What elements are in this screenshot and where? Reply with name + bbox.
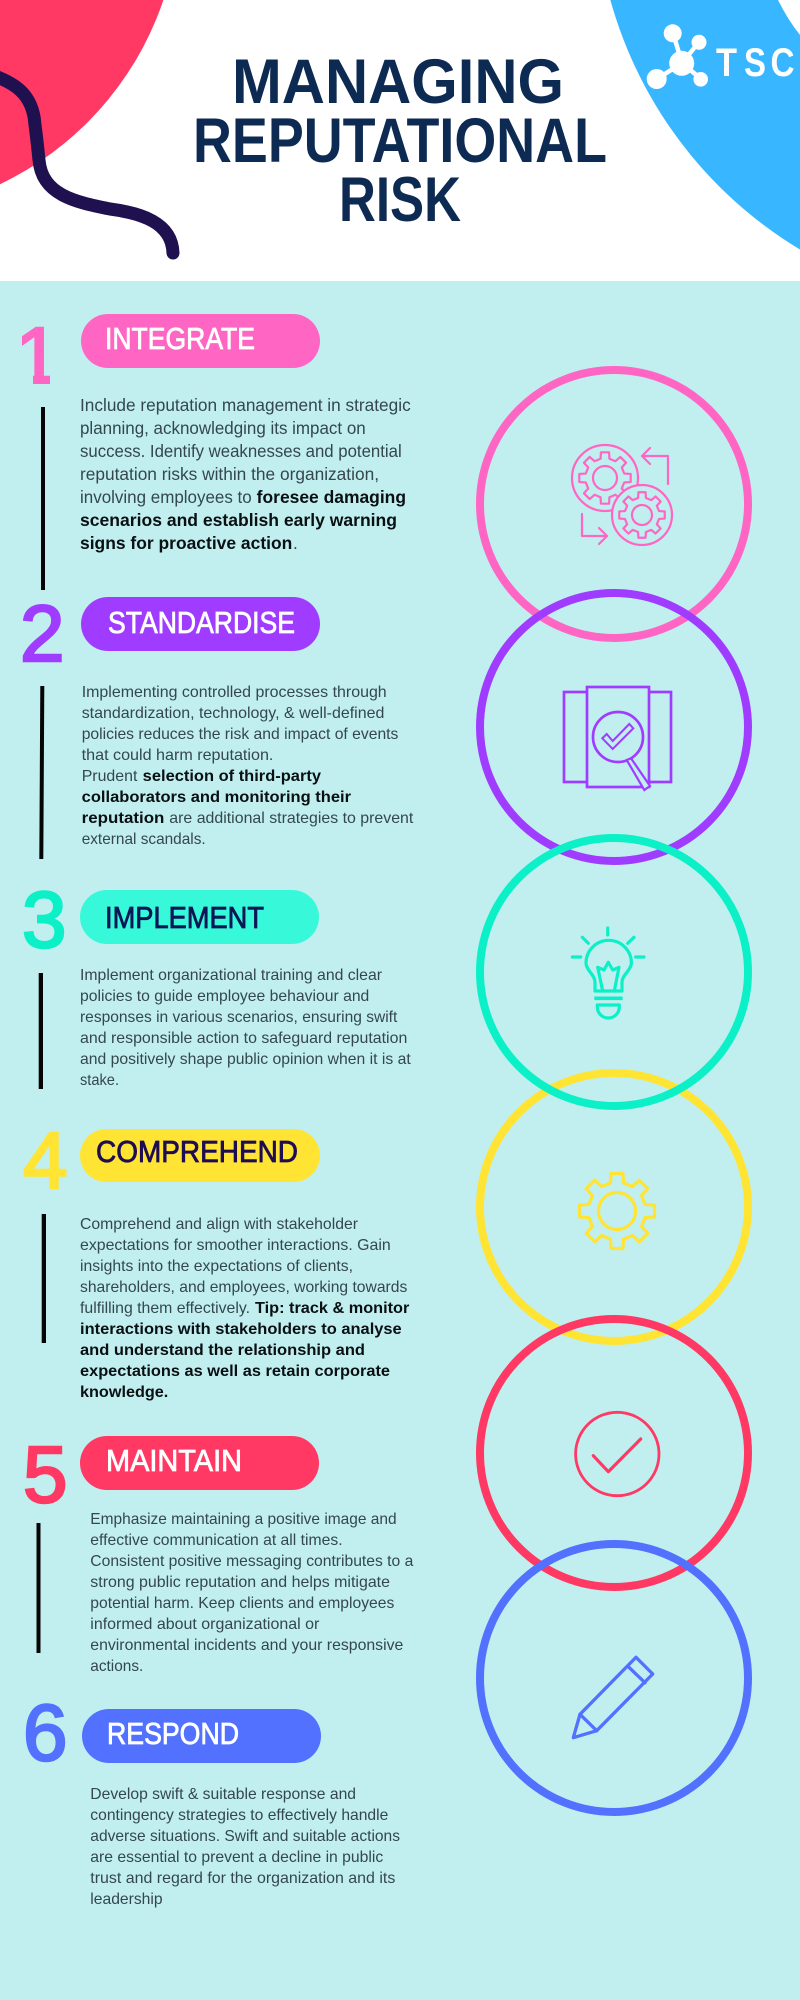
pill: COMPREHEND: COMPREHEND [96,1134,298,1169]
text: integrate description: involving employees to [80,487,252,507]
pill: IMPLEMENT: IMPLEMENT [105,900,264,935]
icon: gears with arrows [572,445,672,545]
pill: INTEGRATE: INTEGRATE [105,321,255,356]
timeline bar 5 [36,1523,40,1653]
step 6: respond [23,1688,400,1908]
ring: implement [480,838,748,1106]
text: maintain description: informed about organizational or [90,1616,320,1633]
text: maintain description: effective communication at all times. [90,1532,343,1549]
text: comprehend description: Comprehend and align with stakeholder [80,1216,359,1233]
text: standardise description: policies reduces the risk and impact of events [82,726,398,743]
text: maintain description: actions. [90,1658,143,1675]
step 1: integrate [16,311,411,590]
number 4: 4 [23,1116,68,1205]
text: integrate description: scenarios and establish early warning [80,510,397,530]
pill: MAINTAIN [80,1436,319,1490]
text: maintain description: environmental incidents and your responsive [90,1637,403,1654]
text: respond description: Develop swift & suitable response and [90,1786,356,1803]
text: implement description: and responsible action to safeguard reputation [80,1030,407,1047]
text: comprehend description: fulfilling them effectively. [80,1300,250,1317]
text: comprehend description: shareholders, and employees, working towards [80,1279,407,1296]
text: maintain description [90,1511,413,1675]
pill: COMPREHEND [80,1129,320,1182]
text: standardise description [82,684,414,848]
pill: INTEGRATE [81,314,320,368]
icon: check in circle [576,1412,659,1496]
title: REPUTATIONAL [193,106,607,176]
step 5: maintain [23,1430,413,1675]
text: standardise description: external scandals. [82,831,206,848]
number 6: 6 [23,1688,68,1777]
timeline bar 4 [42,1214,46,1343]
number 5: 5 [23,1430,68,1519]
text: implement description: Implement organizational training and clear [80,967,383,984]
text: implement description: and positively shape public opinion when it is at [80,1051,411,1068]
pill: RESPOND: RESPOND [107,1716,239,1751]
text: maintain description: strong public reputation and helps mitigate [90,1574,390,1591]
pill: MAINTAIN: MAINTAIN [106,1443,242,1478]
title: MANAGING [232,47,564,117]
text: integrate description: foresee damaging [257,487,406,507]
ring: respond [480,1544,748,1812]
pill: IMPLEMENT [80,890,319,944]
text: comprehend description: expectations for smoother interactions. Gain [80,1237,391,1254]
text: comprehend description [80,1216,409,1401]
text: integrate description: . [293,533,298,553]
text: implement description: responses in various scenarios, ensuring swift [80,1009,398,1026]
ring: comprehend [480,1073,748,1341]
text: maintain description: Consistent positive messaging contributes to a [90,1553,413,1570]
text: integrate description: planning, acknowledging its impact on [80,418,366,438]
text: respond description: contingency strategies to effectively handle [90,1807,388,1824]
text: respond description: leadership [90,1891,163,1908]
text: implement description [80,967,411,1089]
text: standardise description: Prudent [82,768,138,785]
red corner circle [0,0,180,215]
step 2: standardise [20,589,414,859]
text: maintain description: potential harm. Keep clients and employees [90,1595,394,1612]
text: integrate description: signs for proactive action [80,533,292,553]
number 2: 2 [20,589,64,678]
text: respond description: trust and regard for the organization and its [90,1870,395,1887]
logo: TSC [647,24,794,89]
title: RISK [339,165,461,235]
text: integrate description: success. Identify weaknesses and potential [80,441,402,461]
pill: STANDARDISE: STANDARDISE [108,605,295,640]
pill: RESPOND [82,1709,321,1763]
step 3: implement [22,875,411,1089]
icon: light bulb [572,928,644,1018]
text: standardise description: that could harm reputation. [82,747,273,764]
ring: maintain [480,1319,748,1587]
blue corner circle [595,0,800,310]
text: respond description: adverse situations. Swift and suitable actions [90,1828,400,1845]
ring: standardise [480,593,748,861]
timeline bar 1 [41,407,45,590]
timeline bar 2 [39,686,44,859]
text: implement description: stake. [80,1072,119,1089]
text: comprehend description: expectations as well as retain corporate [80,1363,390,1380]
text: integrate description [80,395,411,553]
text: respond description [90,1786,400,1908]
header band [0,0,800,310]
text: comprehend description: Tip: track & monitor [255,1300,409,1317]
text: standardise description: standardization, technology, & well-defined [82,705,384,722]
text: comprehend description: knowledge. [80,1384,168,1401]
number 3: 3 [22,875,66,964]
number 1: 1 [16,311,60,400]
icon: pencil [573,1657,653,1738]
squiggle line [0,76,173,253]
text: comprehend description: insights into the expectations of clients, [80,1258,353,1275]
text: respond description: are essential to prevent a decline in public [90,1849,383,1866]
text: comprehend description: interactions with stakeholders to analyse [80,1321,402,1338]
text: standardise description: collaborators and monitoring their [82,789,351,806]
text: standardise description: Implementing controlled processes through [82,684,387,701]
title [193,47,607,235]
text: standardise description: selection of third-party [143,768,321,785]
logo: TSC: T [716,41,737,85]
icon: documents with magnifier [564,687,671,790]
text: implement description: policies to guide employee behaviour and [80,988,369,1005]
text: integrate description: Include reputation management in strategic [80,395,411,415]
text: comprehend description: and understand the relationship and [80,1342,365,1359]
logo: TSC: C [770,41,794,85]
text: standardise description: reputation [82,810,164,827]
icon: gear [579,1173,655,1249]
text: standardise description: are additional strategies to prevent [169,810,414,827]
text: maintain description: Emphasize maintaining a positive image and [90,1511,397,1528]
timeline bar 3 [39,973,43,1089]
ring: integrate [480,370,748,638]
text: integrate description: reputation risks within the organization, [80,464,379,484]
step 4: comprehend [23,1116,409,1401]
logo: TSC: S [744,41,766,85]
pill: STANDARDISE [81,597,320,651]
